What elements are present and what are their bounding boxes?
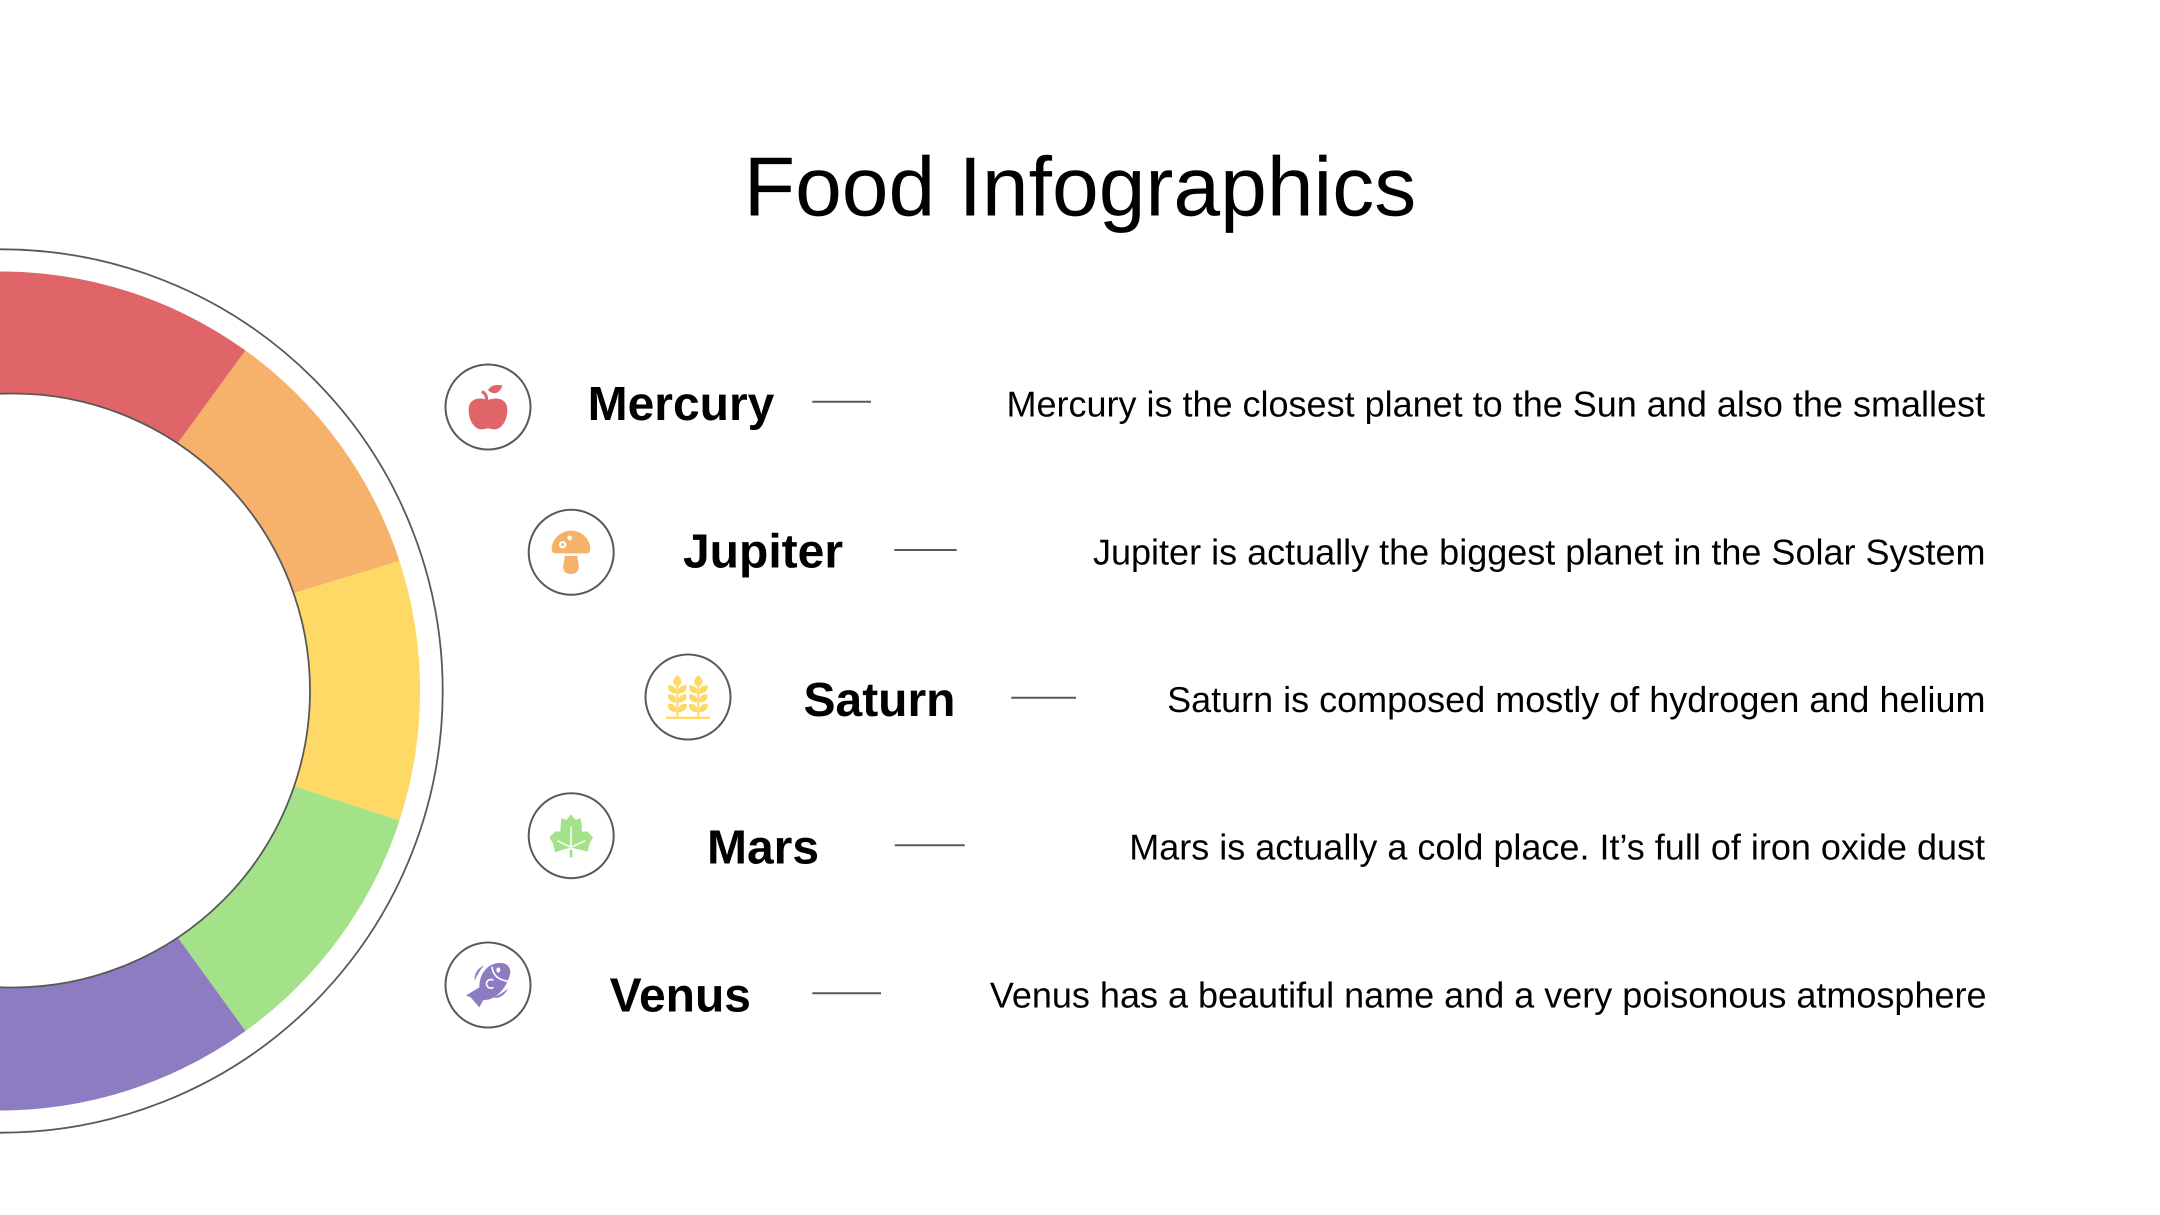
description: Saturn: Saturn is composed mostly of hydrogen and helium [1167,679,1986,720]
connector line [812,401,871,403]
icon: mushroom [529,510,614,595]
segment: yellow [278,561,420,820]
segment: orange [167,350,400,598]
icon: apple [446,364,530,450]
icon: leaf [529,793,614,878]
row: Venus [446,942,1986,1028]
description: Jupiter: Jupiter is actually the biggest planet in the Solar System [1093,531,1986,572]
outer ring outline [0,249,443,1133]
name: Venus: Venus [610,970,751,1023]
title: Food Infographics [744,140,1416,234]
name: Mars: Mars [707,821,819,874]
description: Mercury: Mercury is the closest planet to the Sun and also the smallest [1006,383,1985,424]
row: Mercury [446,364,1985,450]
icon: wheat [646,654,730,740]
segment: red [0,271,246,458]
connector line [895,844,965,846]
row: Mars [529,793,1985,878]
connector line [894,549,957,551]
description: Venus: Venus has a beautiful name and a very poisonous atmosphere [990,974,1986,1016]
name: Mercury: Mercury [588,378,775,431]
icon: fish [446,942,530,1028]
description: Mars: Mars is actually a cold place. It’s full of iron oxide dust [1129,827,1985,868]
connector line [812,992,881,994]
donut chart [0,249,443,1133]
row: Saturn [646,654,1986,740]
name: Jupiter: Jupiter [683,526,843,579]
row: Jupiter [529,510,1986,595]
inner circle [0,394,310,988]
name: Saturn: Saturn [803,674,956,727]
segment: green [168,781,400,1031]
segment: purple [0,924,246,1110]
connector line [1011,697,1076,699]
